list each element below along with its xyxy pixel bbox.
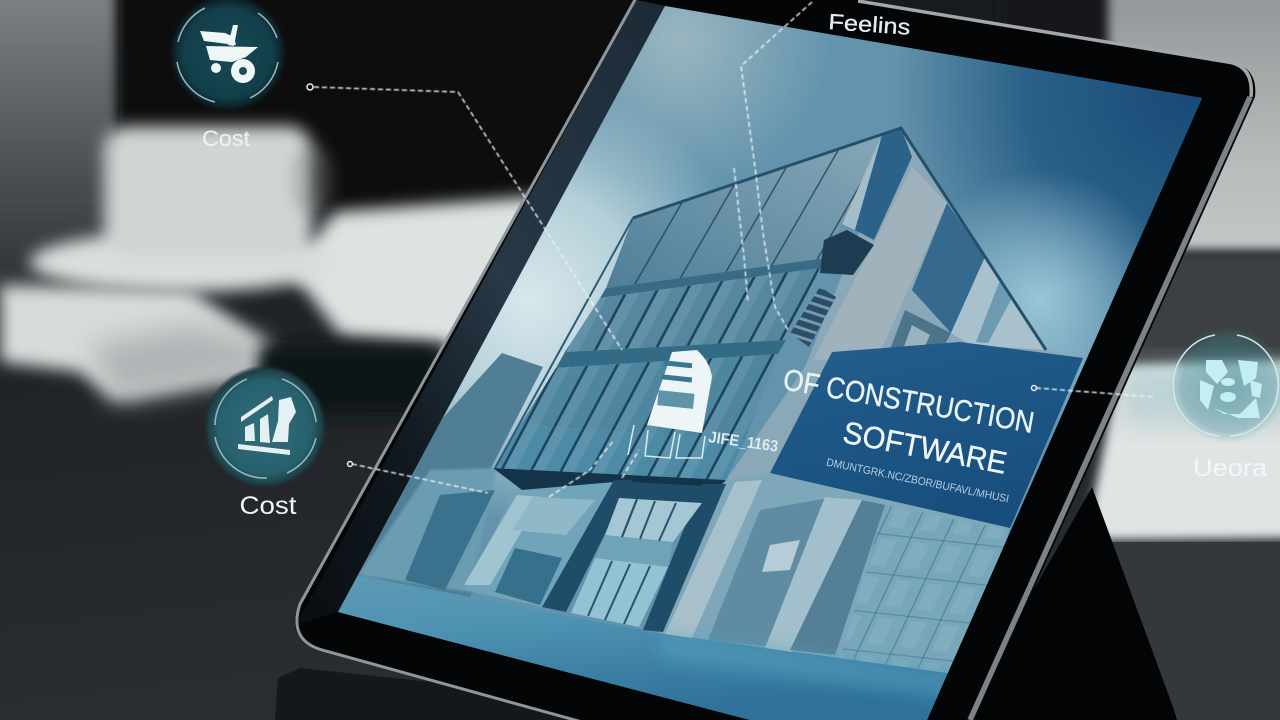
left bezel <box>296 0 665 625</box>
tablet <box>295 0 1255 720</box>
roof edge <box>633 128 1046 350</box>
icon: chart with arrow <box>238 396 296 455</box>
lower right facade <box>658 473 1010 700</box>
banner small text: DMUNTGRK.NC/ZBOR/BUFAVL/MHUSI <box>825 457 1010 505</box>
neighbouring building <box>355 353 543 600</box>
blurred notebook <box>0 285 270 400</box>
tablet stand <box>275 487 1177 720</box>
blue banner <box>770 342 1083 528</box>
building front glass face <box>495 135 882 480</box>
building right face <box>726 128 1083 528</box>
blurred coffee cup and saucer <box>30 126 340 292</box>
screen sky <box>330 0 1210 720</box>
blurred paper on desk <box>290 197 600 348</box>
label: Cost <box>240 492 297 520</box>
external staircase <box>790 230 874 347</box>
icon: cluster <box>1200 360 1262 418</box>
top screen label: Feelins <box>828 9 911 40</box>
small outlined labels: JIFE_1163 <box>707 429 779 456</box>
tablet right edge highlight <box>970 97 1250 720</box>
callout: cost (bottom) <box>203 365 327 520</box>
banner heading: OF CONSTRUCTION <box>781 363 1037 440</box>
entrance block <box>405 468 726 632</box>
ring <box>177 8 278 102</box>
entrance windows <box>605 498 702 542</box>
tablet rim <box>297 0 636 720</box>
ring <box>1173 335 1278 436</box>
label: Cost <box>202 126 250 151</box>
dark frame pillars <box>542 480 632 612</box>
canopy <box>493 468 726 490</box>
tablet screen <box>330 0 1210 720</box>
callout: usage (right) <box>1170 327 1280 482</box>
blue banner: SOFTWARE <box>840 415 1010 481</box>
ring <box>215 379 316 478</box>
small outlined labels <box>628 425 779 458</box>
label: Ueora <box>1193 455 1268 482</box>
lower left facade <box>358 468 497 592</box>
document icon <box>647 350 712 433</box>
connector end points <box>307 84 1036 466</box>
callout: cost (top) <box>168 0 288 151</box>
dashed connector lines <box>314 2 1155 497</box>
entrance window mullions <box>588 499 676 624</box>
icon: cart <box>200 25 258 83</box>
blurred paper at right <box>1085 360 1280 540</box>
street <box>330 570 965 720</box>
tablet body <box>295 0 1255 720</box>
